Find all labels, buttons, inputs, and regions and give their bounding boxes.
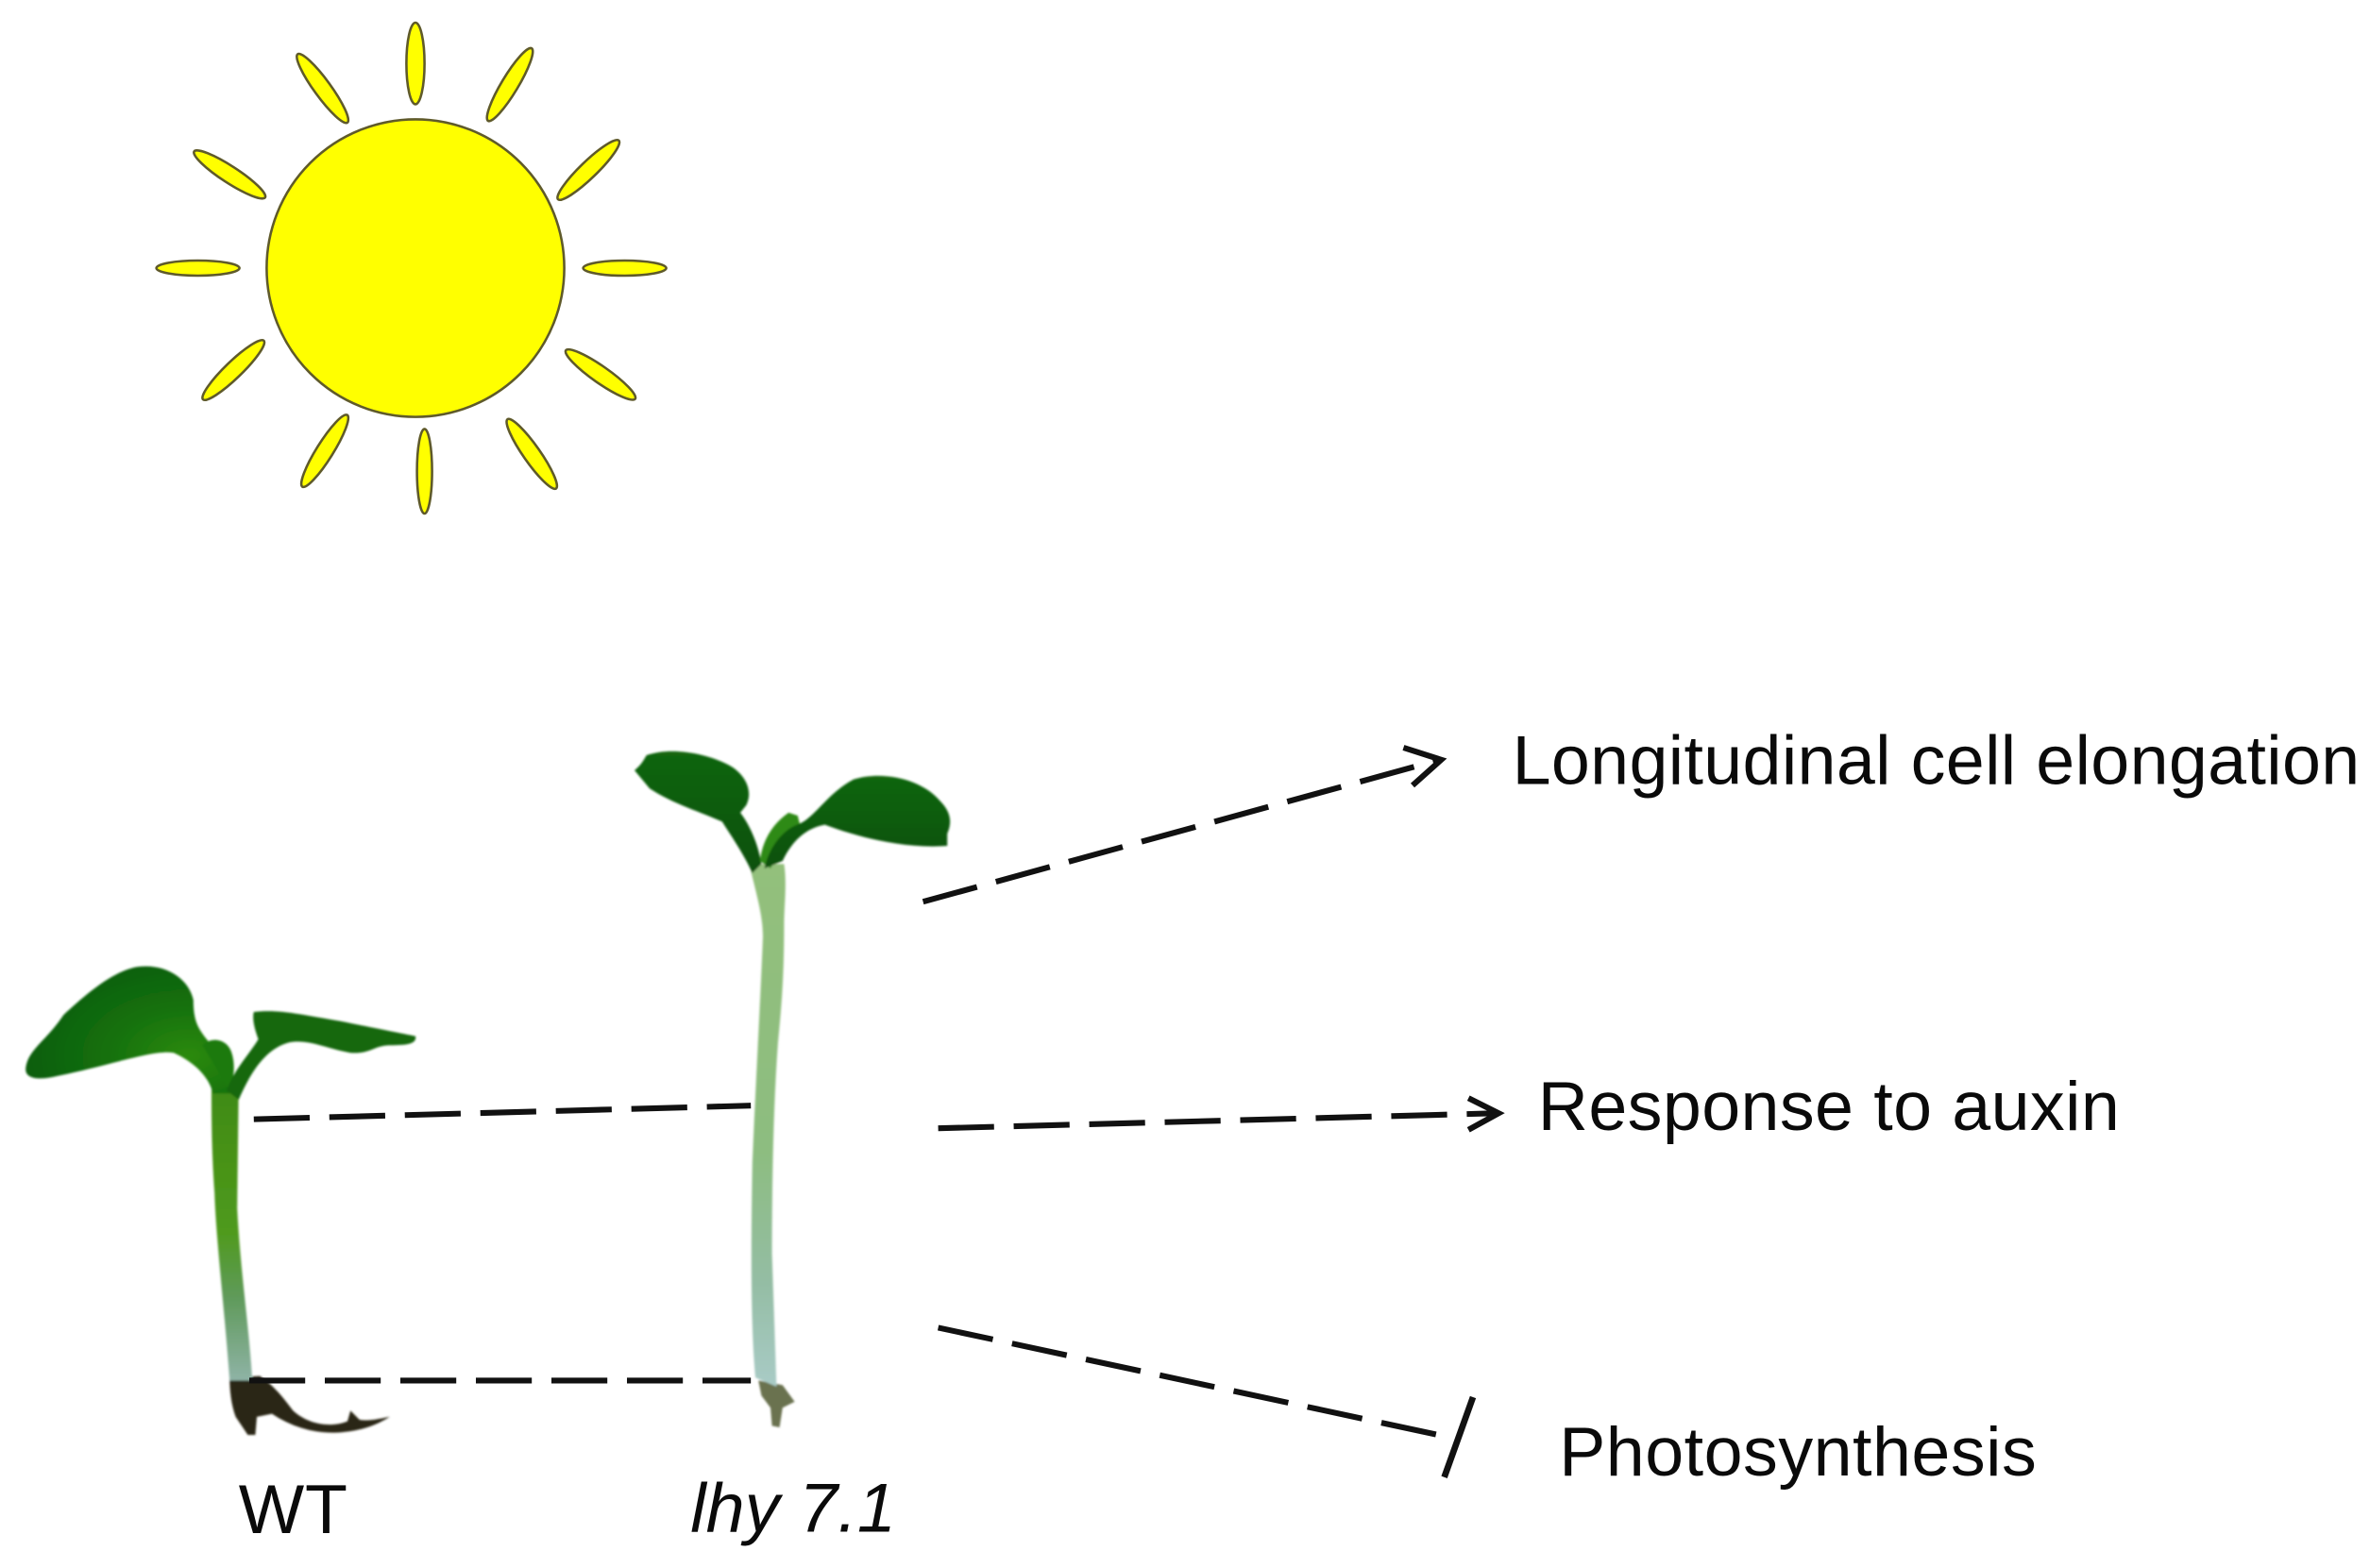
- WT left cotyledon: [25, 967, 229, 1093]
- arrow: to response to auxin: [939, 1098, 1498, 1130]
- arrow: to longitudinal cell elongation: [923, 748, 1441, 902]
- label: response to auxin: Response to auxin: [1538, 1067, 2120, 1145]
- lhy right cotyledon: [765, 776, 950, 868]
- seedling: lhy 7.1: [635, 751, 950, 1427]
- WT right cotyledon: [227, 1011, 415, 1100]
- sun rays: [157, 23, 667, 514]
- label: longitudinal cell elongation: Longitudinal cell elongation: [1513, 720, 2360, 799]
- lhy root: [758, 1380, 795, 1427]
- label: photosynthesis: Photosynthesis: [1559, 1412, 2037, 1491]
- WT apical bud: [202, 1040, 234, 1090]
- inhibition line: to photosynthesis: [939, 1327, 1473, 1477]
- lhy apical bud: [760, 813, 801, 868]
- sun disc: [266, 119, 565, 417]
- icon: sun: [157, 23, 667, 514]
- lhy stem: [750, 864, 786, 1387]
- label: lhy 7.1: lhy 7.1: [690, 1468, 896, 1546]
- label: WT: WT: [239, 1470, 347, 1548]
- connector: WT to lhy lower dashed line: [249, 1379, 751, 1382]
- connector: WT to lhy upper dashed line: [254, 1105, 751, 1120]
- lhy left cotyledon: [635, 751, 761, 873]
- WT root: [229, 1376, 390, 1435]
- WT stem: [212, 1082, 252, 1380]
- seedling: WT: [25, 967, 415, 1435]
